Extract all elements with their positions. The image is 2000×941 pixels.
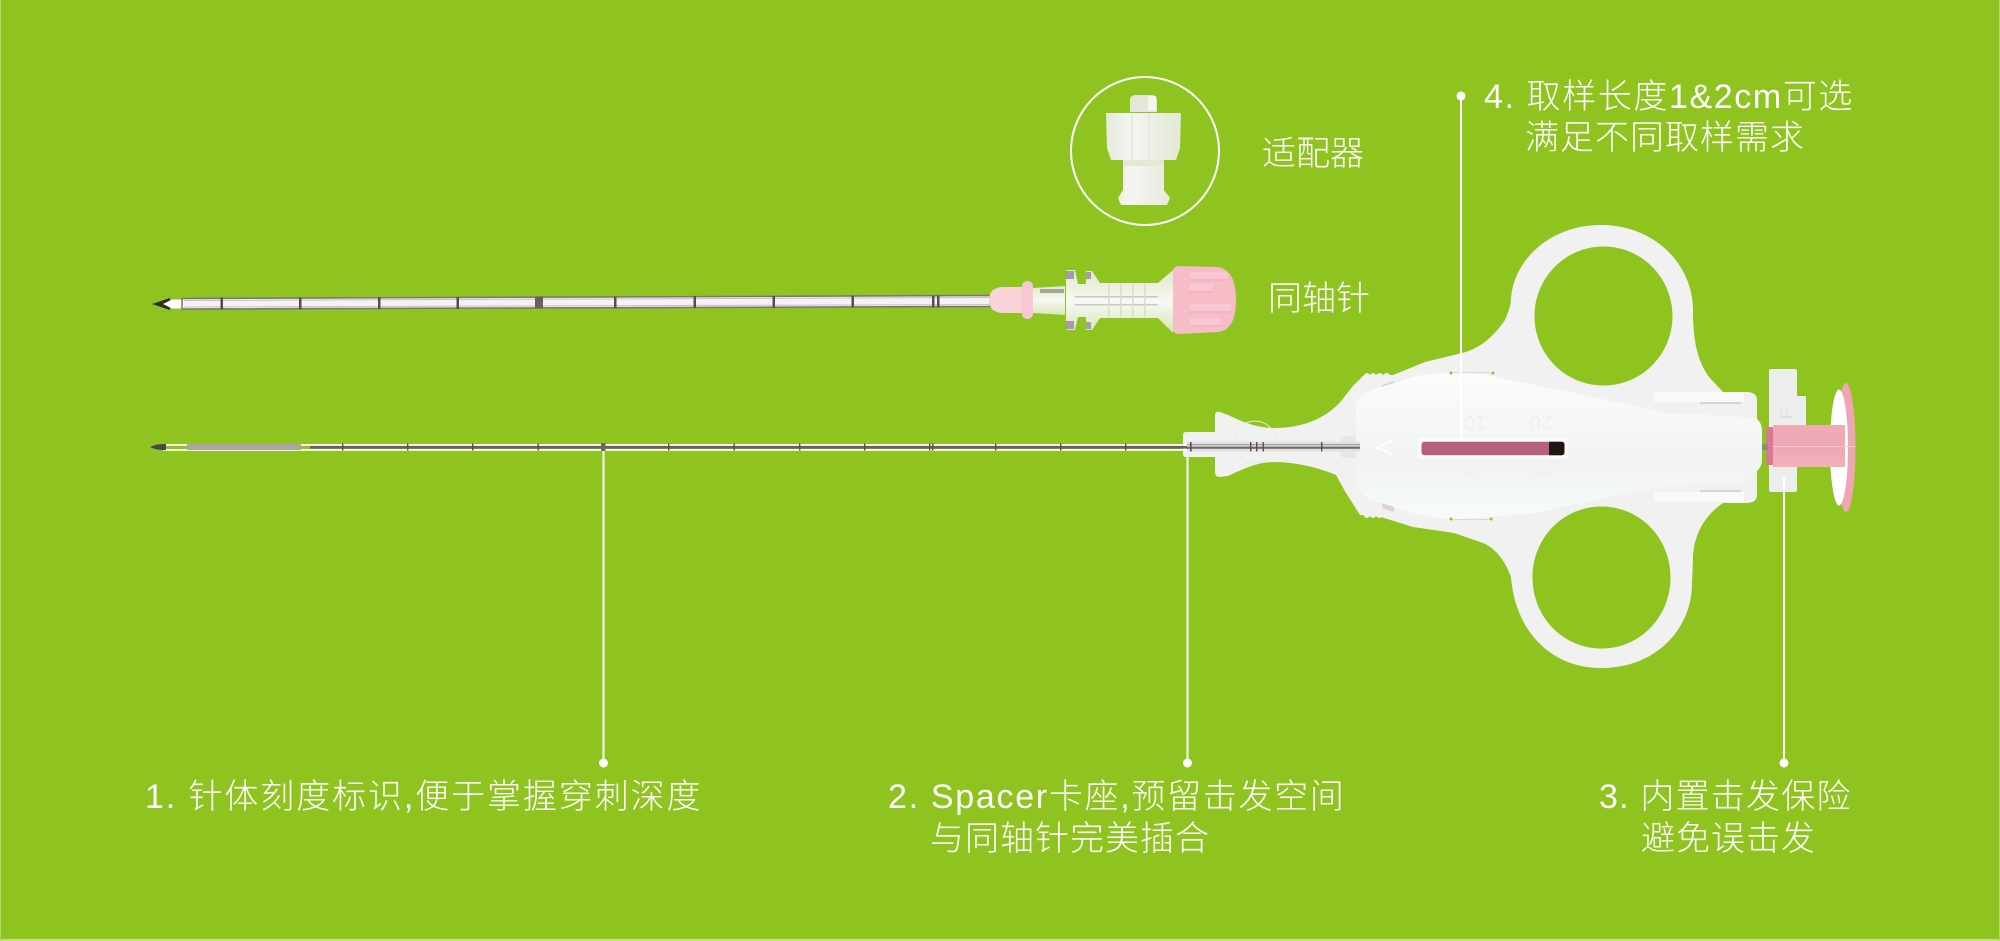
- biopsy handle: [1183, 225, 1762, 668]
- callout 3: [1599, 778, 1852, 858]
- needle graduations: [220, 296, 940, 310]
- pink plunger: [1773, 425, 1845, 467]
- embossed scale numbers: [1463, 411, 1552, 477]
- leader 1: [599, 451, 608, 768]
- rear disc: [1836, 383, 1856, 512]
- stylet graduations: [342, 442, 1322, 452]
- sample window: [1418, 438, 1568, 458]
- stylet shaft: [163, 444, 1187, 446]
- label: adapter: 适配器: [1262, 135, 1364, 173]
- rear frame slots: [1654, 392, 1744, 502]
- pink collar: [1766, 427, 1774, 465]
- stylet tip: [150, 444, 166, 450]
- pink stub: [989, 287, 1023, 313]
- neck emboss: [1234, 421, 1276, 463]
- leader 3: [1780, 477, 1788, 768]
- embossed scale numbers: 2: [1529, 465, 1551, 477]
- leader 4: [1456, 92, 1466, 441]
- embossed scale numbers: 10: [1464, 411, 1486, 433]
- callout 4: 4. 取样长度1&2cm可选: [1484, 78, 1854, 116]
- adapter circle with adapter icon: [1071, 77, 1219, 225]
- tab lettering: F: [1777, 409, 1796, 419]
- callout 2: [888, 778, 1346, 858]
- grip bumps: [1364, 373, 1393, 518]
- needle shaft: [182, 296, 990, 309]
- sliding body: [1356, 373, 1762, 519]
- notch section: [187, 444, 301, 450]
- callout 4: 满足不同取样需求: [1525, 119, 1805, 157]
- firing safety assembly: [1762, 369, 1856, 512]
- callout 2: 2. Spacer卡座,预留击发空间: [888, 778, 1346, 816]
- callout 3: 避免误击发: [1641, 820, 1816, 858]
- needle tip: [152, 298, 170, 310]
- safety tab: [1769, 369, 1797, 492]
- coaxial needle: [152, 266, 1236, 334]
- green corner dots: [1450, 372, 1494, 520]
- leader 2: [1183, 457, 1192, 768]
- label: coaxial needle: 同轴针: [1268, 280, 1370, 318]
- callout 1: 1. 针体刻度标识,便于掌握穿刺深度: [145, 778, 702, 816]
- needle inside handle: [1187, 442, 1360, 452]
- triangle mark: [1377, 440, 1393, 455]
- embossed scale numbers: 20: [1530, 411, 1552, 433]
- handle frame: [1183, 225, 1757, 668]
- pink cap: [1173, 266, 1236, 334]
- needle hub: [1033, 286, 1065, 315]
- callout 4: [1484, 78, 1854, 157]
- callout 2: 与同轴针完美插合: [930, 820, 1210, 858]
- lower stylet needle: [150, 442, 1322, 452]
- embossed scale numbers: 1: [1463, 465, 1485, 477]
- callout 3: 3. 内置击发保险: [1599, 778, 1852, 816]
